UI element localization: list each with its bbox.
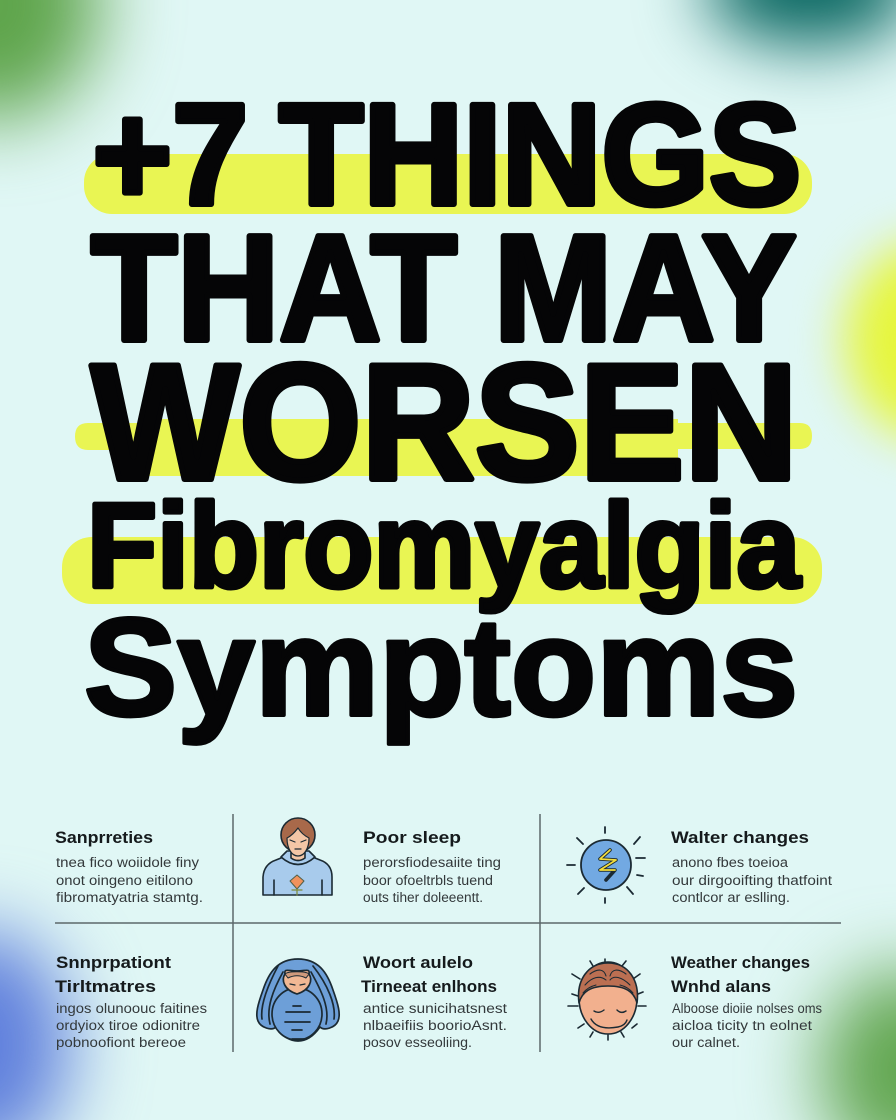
heading: Poor sleep (363, 828, 461, 847)
heading: Wnhd alans (671, 977, 771, 996)
heading: Tirneeat enlhons (361, 977, 497, 996)
text block: aicloa ticity tn eolnet (672, 1018, 812, 1033)
panel: bottom left symptom (55, 953, 207, 1050)
panel: walter changes (567, 827, 832, 905)
icon: sad person (263, 818, 332, 895)
text block: boor ofoeltrbls tuend (363, 873, 493, 888)
heading: Woort aulelo (363, 953, 473, 972)
panel: weather changes (568, 953, 822, 1050)
text block (56, 1001, 207, 1050)
text block: anono fbes toeioa (672, 855, 789, 870)
text block: fibromatyatria stamtg. (56, 890, 203, 905)
text block: perorsfiodesaiite ting (363, 855, 501, 870)
heading: Weather changes (671, 953, 810, 972)
heading: Sanprreties (55, 828, 153, 847)
heading: Snnprpationt (56, 953, 171, 972)
text block: our calnet. (672, 1035, 740, 1050)
text block: ingos olunoouc faitines (56, 1001, 207, 1016)
highlight: line one (84, 154, 812, 214)
panel: worst sleep (257, 953, 507, 1050)
title (62, 73, 822, 745)
text block: onot oingeno eitilono (56, 873, 193, 888)
heading: Tirltmatres (55, 977, 156, 996)
text block: nlbaeifiis boorioAsnt. (363, 1018, 507, 1033)
panel: poor sleep (263, 818, 501, 905)
heading (55, 953, 171, 996)
title line: +7 THINGS: THINGS (279, 73, 801, 235)
text block: antice sunicihatsnest (363, 1001, 507, 1016)
text block (672, 1001, 822, 1050)
text block: outs tiher doleeentt. (363, 890, 483, 905)
text block: Alboose dioiie nolses oms (672, 1001, 822, 1016)
text block: ordyiox tiroe odionitre (56, 1018, 200, 1033)
title line: Fibromyalgia: Fibromyalgia (87, 479, 801, 613)
icon: swaddled figure (257, 959, 339, 1041)
title line: WORSEN: WORSEN (91, 330, 798, 515)
heading (671, 953, 810, 996)
text block (56, 855, 203, 905)
icon: sun with lightning (567, 827, 645, 903)
title line: +7 THINGS: +7 (92, 74, 248, 235)
text block: contlcor ar eslling. (672, 890, 790, 905)
title line: THAT MAY: THAT (91, 204, 457, 372)
heading: Walter changes (671, 828, 809, 847)
text block: our dirgooifting thatfoint (672, 873, 832, 888)
highlight: line three (75, 419, 812, 476)
highlight: line four (62, 537, 822, 604)
panel: top left symptom (55, 828, 203, 905)
icon: head with radiating lines (568, 959, 646, 1040)
title line: THAT MAY (91, 204, 796, 373)
heading (361, 953, 497, 996)
text block (363, 855, 501, 905)
text block (363, 1001, 507, 1050)
text block (672, 855, 832, 905)
text block: posov esseoliing. (363, 1035, 472, 1050)
text block: pobnoofiont bereoe (56, 1035, 186, 1050)
title line: THAT MAY: MAY (494, 204, 796, 373)
title line: Symptoms: Symptoms (84, 589, 798, 745)
text block: tnea fico woiidole finy (56, 855, 199, 870)
